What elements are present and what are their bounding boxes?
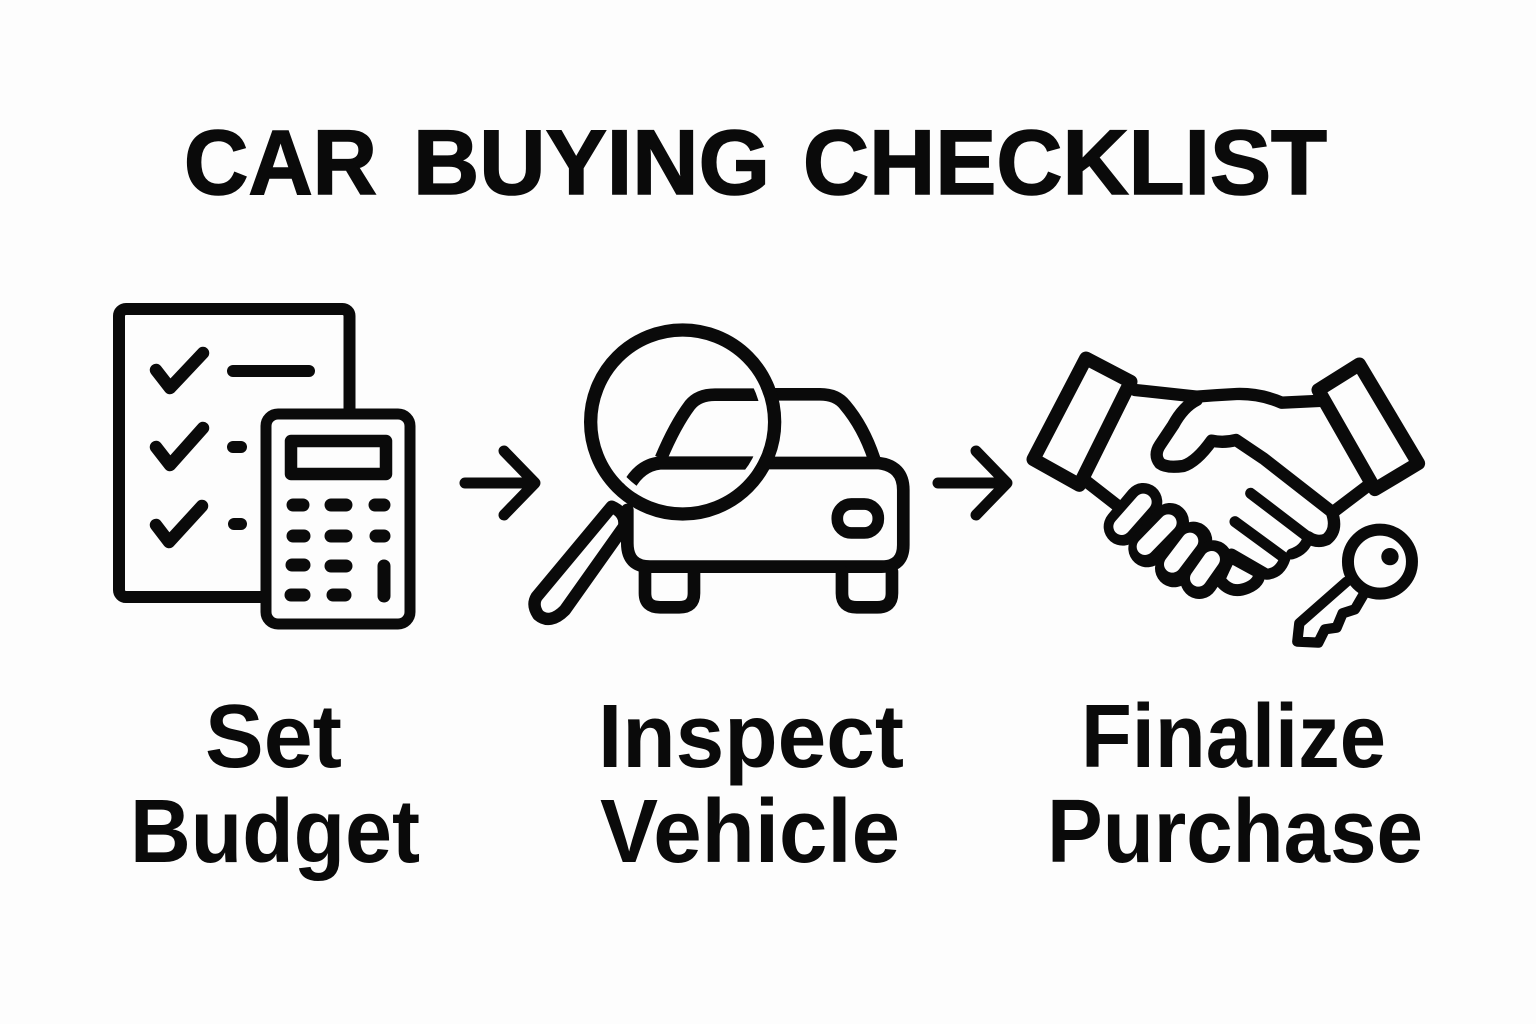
label: set budget: Budget <box>130 782 420 882</box>
arrow: budget to inspect <box>465 451 535 515</box>
gripping fingers interior <box>1122 502 1212 578</box>
gripping fingers outline <box>1123 502 1213 580</box>
finger creases <box>1232 493 1308 574</box>
icon: magnifier over car <box>535 330 903 619</box>
right cuff <box>1318 364 1418 489</box>
label: finalize purchase <box>1047 687 1423 882</box>
calculator keys <box>291 505 384 596</box>
car seen through lens <box>661 395 763 458</box>
arrow: inspect to finalize <box>938 451 1007 515</box>
label: inspect vehicle: Inspect <box>598 687 904 787</box>
lens gap <box>601 340 765 504</box>
car body <box>627 463 903 567</box>
car wheels <box>645 572 694 607</box>
car roof <box>773 394 874 458</box>
key hole <box>1381 548 1399 565</box>
thumb and upper hand edge <box>1157 400 1334 541</box>
checkmarks <box>156 353 203 542</box>
top of hands <box>1135 390 1323 403</box>
label: finalize purchase: Purchase <box>1047 782 1423 882</box>
icon: checklist and calculator <box>119 309 410 624</box>
label: set budget <box>130 687 420 882</box>
title: BUYING <box>413 112 770 214</box>
label: inspect vehicle <box>598 687 904 882</box>
left cuff <box>1033 358 1131 485</box>
title <box>184 112 1327 214</box>
key ring <box>1348 530 1412 594</box>
calculator display <box>291 441 386 474</box>
magnifier handle <box>535 507 624 619</box>
car headlight <box>837 504 878 533</box>
icon: handshake with key <box>1033 358 1418 643</box>
title: CHECKLIST <box>803 112 1327 214</box>
little finger <box>1219 557 1259 590</box>
left arm lower edge <box>1087 482 1117 505</box>
magnifier ring <box>591 330 775 514</box>
key blade <box>1297 582 1363 643</box>
magnifier lens interior <box>593 332 773 512</box>
checklist lines <box>233 371 309 524</box>
title: CAR <box>184 112 377 214</box>
right arm lower edge <box>1335 487 1367 511</box>
checklist sheet <box>119 309 350 597</box>
label: finalize purchase: Finalize <box>1081 687 1386 787</box>
label: inspect vehicle: Vehicle <box>600 782 900 882</box>
label: set budget: Set <box>205 687 342 787</box>
calculator body <box>266 414 410 624</box>
